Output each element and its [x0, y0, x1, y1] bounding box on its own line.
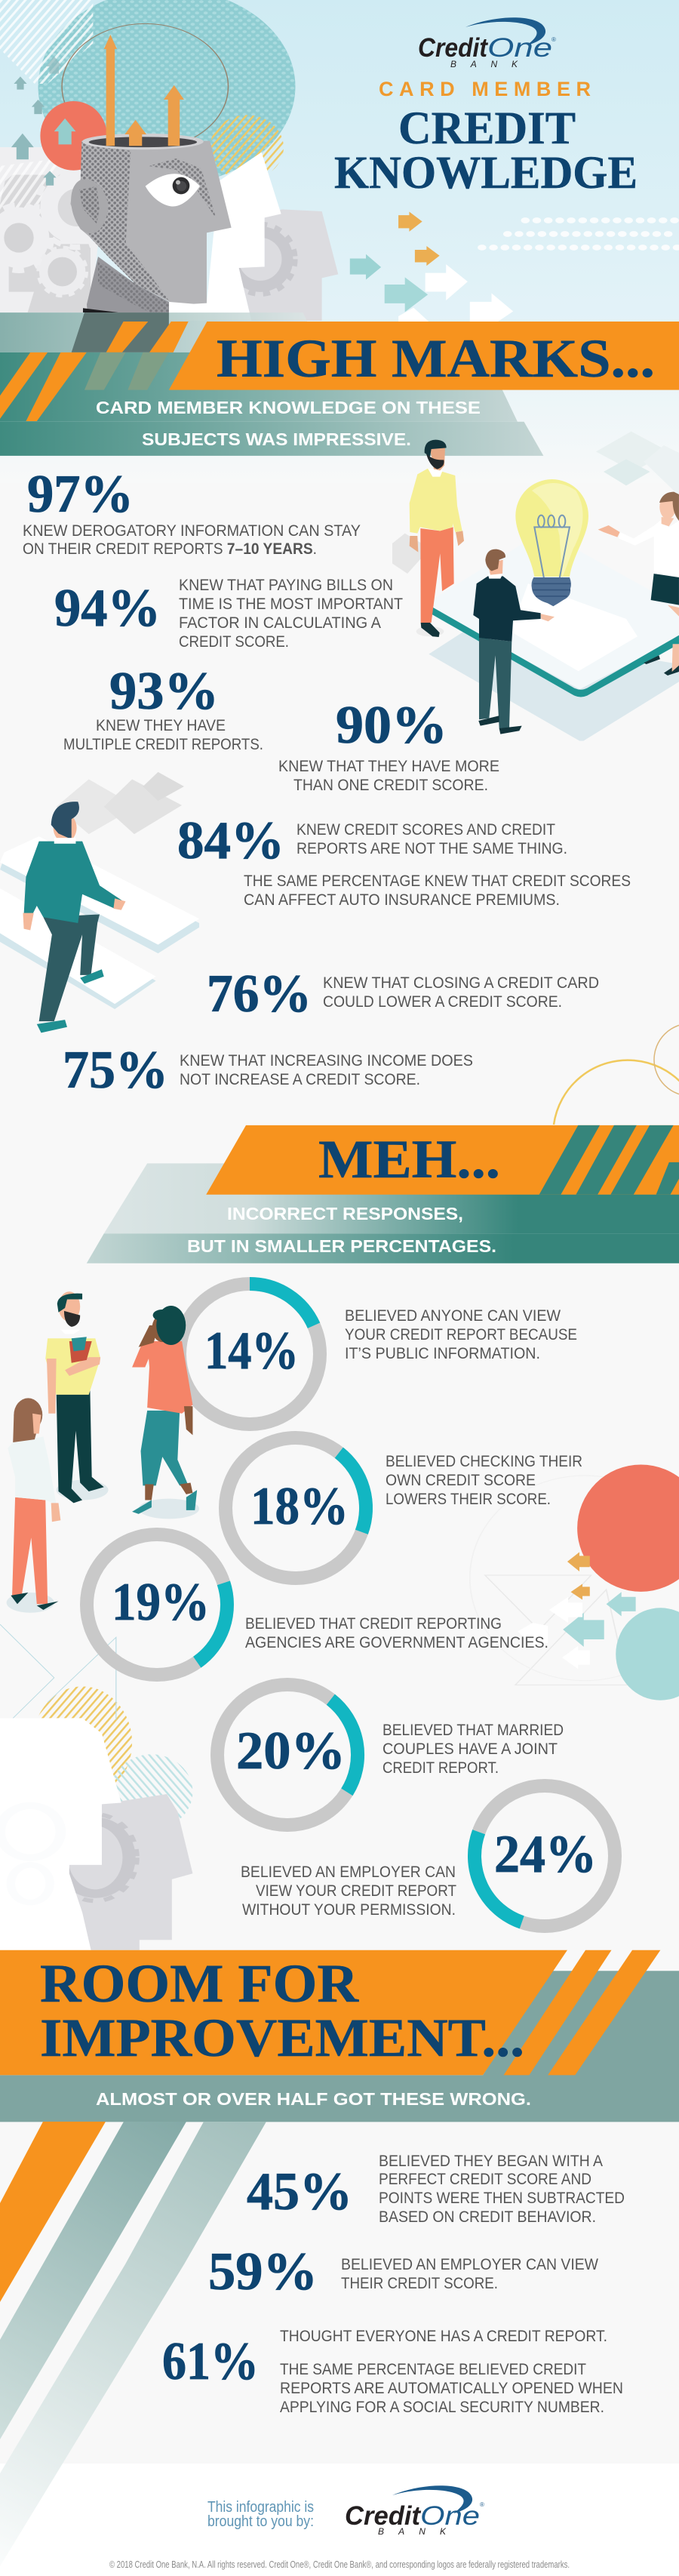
stat: 94%: 94%	[54, 579, 161, 638]
text: 24%: VIEW YOUR CREDIT REPORT	[256, 1882, 456, 1900]
stat: 97%: KNEW DEROGATORY INFORMATION CAN STAY	[23, 522, 361, 540]
head rim and rising arrows	[82, 35, 204, 149]
stat: 84%: 84%	[177, 811, 284, 870]
stat: 94%: KNEW THAT PAYING BILLS ON	[179, 577, 393, 594]
ring: 19%: 19%	[112, 1573, 210, 1632]
stat: 90%: 90%	[336, 696, 447, 755]
halftone back of head	[81, 142, 168, 300]
illustration: people around light bulb	[410, 440, 679, 734]
heading: credit knowledge: CREDIT	[398, 103, 576, 154]
ring: 24%: 24%	[494, 1825, 597, 1884]
banner: high marks: SUBJECTS WAS IMPRESSIVE.	[142, 429, 411, 449]
right pointing arrows	[350, 212, 513, 322]
text: 19%: BELIEVED THAT CREDIT REPORTING	[245, 1615, 502, 1633]
ring: 20%: 20%	[236, 1722, 346, 1780]
hero backdrop shapes	[0, 0, 679, 322]
orange band	[169, 322, 679, 390]
ring: 19%	[87, 1534, 227, 1675]
stat: 59%: BELIEVED AN EMPLOYER CAN VIEW	[341, 2256, 598, 2273]
ring: 24%	[475, 1786, 615, 1926]
stat: 76%: 76%	[207, 965, 312, 1023]
footer credit text: This infographic is	[207, 2499, 314, 2516]
ring: 14%: 14%	[204, 1322, 299, 1380]
stat: 94%	[54, 577, 403, 651]
stat: 76%: KNEW THAT CLOSING A CREDIT CARD	[323, 974, 599, 992]
ring: 14%	[180, 1284, 320, 1424]
stat: 97%: ON THEIR CREDIT REPORTS 7–10 YEARS.	[23, 540, 317, 558]
face	[70, 141, 232, 304]
text: 18%	[386, 1453, 582, 1508]
text: 24%	[241, 1864, 456, 1919]
woman presenting	[598, 492, 679, 676]
orange band	[0, 1950, 567, 2075]
footer credit text: brought to you by:	[207, 2513, 314, 2530]
ghost heads with gears	[0, 147, 338, 321]
diamonds	[392, 432, 679, 574]
stat: 94%: TIME IS THE MOST IMPORTANT	[179, 596, 403, 613]
stat: 84%: THE SAME PERCENTAGE KNEW THAT CREDIT SCORES	[244, 873, 631, 890]
stat: 59%: THEIR CREDIT SCORE.	[341, 2275, 498, 2292]
ring: 18%	[226, 1438, 366, 1578]
band: upper grey	[0, 312, 321, 352]
band: lower gradient	[0, 422, 543, 456]
banner: meh: BUT IN SMALLER PERCENTAGES.	[187, 1236, 496, 1256]
man with books	[45, 1291, 108, 1503]
teal band	[0, 1971, 679, 2122]
stat: 94%: FACTOR IN CALCULATING A	[179, 614, 381, 632]
ghost head with gear	[0, 1718, 192, 1950]
stat: 61%: THOUGHT EVERYONE HAS A CREDIT REPORT.	[280, 2328, 607, 2345]
subtitle band lower	[87, 1233, 679, 1263]
stat: 94%: CREDIT SCORE.	[179, 633, 289, 651]
platform	[429, 531, 679, 697]
stat: 59%	[208, 2242, 598, 2301]
text: 24%: WITHOUT YOUR PERMISSION.	[242, 1901, 456, 1919]
banner: high marks	[0, 312, 679, 456]
illustration: three people	[7, 1291, 199, 1613]
decorative yellow arcs	[554, 1023, 679, 1137]
banner: meh: INCORRECT RESPONSES,	[227, 1204, 463, 1223]
large teal circle	[38, 0, 295, 185]
right side decoration: circles and arrows	[470, 1464, 679, 1700]
logo: Credit One Bank: BANK	[450, 59, 518, 69]
heading: card member: CARD MEMBER	[379, 78, 591, 100]
stat: 84%: CAN AFFECT AUTO INSURANCE PREMIUMS.	[244, 891, 560, 909]
text: 20%: CREDIT REPORT.	[383, 1759, 499, 1777]
platforms	[0, 836, 199, 1009]
logo: Credit One Bank: ®	[551, 36, 556, 43]
footer logo: BANK	[378, 2526, 447, 2537]
ring: 20%	[217, 1685, 358, 1825]
stat: 90%: KNEW THAT THEY HAVE MORE	[278, 758, 499, 775]
woman from behind	[7, 1398, 60, 1613]
stat: 61%	[162, 2328, 623, 2416]
stat: 45%: PERFECT CREDIT SCORE AND	[379, 2171, 591, 2188]
white ghost head	[169, 152, 281, 321]
text: 14%: YOUR CREDIT REPORT BECAUSE	[345, 1326, 577, 1343]
footer logo	[345, 2485, 484, 2537]
neck shadow	[72, 312, 169, 352]
diagonal stripes	[0, 2122, 266, 2566]
stat: 75%	[63, 1041, 473, 1100]
neck	[83, 257, 169, 321]
teal stripes	[539, 1125, 679, 1195]
decorative thin lines and striped circles	[0, 1624, 192, 1830]
logo: Credit One Bank: One	[487, 33, 552, 63]
stat: 61%: 61%	[162, 2332, 259, 2391]
text: 14%: IT’S PUBLIC INFORMATION.	[345, 1345, 540, 1362]
text: 14%	[345, 1307, 577, 1362]
light bulb	[515, 479, 588, 606]
heading: credit knowledge: KNOWLEDGE	[334, 148, 638, 199]
text: 24%: BELIEVED AN EMPLOYER CAN	[241, 1864, 456, 1881]
banner: meh	[87, 1125, 679, 1263]
footer logo: Credit	[345, 2501, 421, 2531]
logo: Credit One Bank: Credit	[418, 33, 488, 63]
stat: 45%: 45%	[247, 2162, 352, 2221]
banner: room for improvement: ROOM FOR	[40, 1953, 359, 2014]
banner: room for improvement: IMPROVEMENT...	[40, 2008, 524, 2068]
stripes	[0, 322, 189, 421]
stat: 75%: NOT INCREASE A CREDIT SCORE.	[180, 1071, 420, 1088]
rising orange arrows	[104, 35, 184, 146]
text: 14%: BELIEVED ANYONE CAN VIEW	[345, 1307, 561, 1325]
stat: 76%: COULD LOWER A CREDIT SCORE.	[323, 993, 562, 1011]
right ghost head	[226, 209, 338, 321]
stat: 97%	[23, 465, 361, 558]
man	[23, 802, 125, 1033]
stat: 93%: KNEW THEY HAVE	[96, 717, 226, 734]
stat: 45%	[247, 2153, 625, 2226]
red circle	[40, 101, 107, 171]
man in yellow sweater	[410, 440, 464, 637]
banner: meh: MEH...	[318, 1129, 500, 1190]
illustration: people around light bulb (background part)	[392, 432, 679, 741]
stat: 90%: THAN ONE CREDIT SCORE.	[293, 777, 488, 794]
man in dark sweater	[473, 549, 555, 734]
stat: 90%	[278, 696, 499, 794]
platform shadow	[429, 629, 679, 741]
footer logo: One	[420, 2501, 480, 2531]
heading: credit knowledge	[334, 103, 638, 199]
banner: room for improvement	[0, 1950, 679, 2122]
stat: 75%: 75%	[63, 1041, 168, 1100]
text: 18%: LOWERS THEIR SCORE.	[386, 1491, 551, 1508]
stat: 93%	[63, 662, 263, 753]
text: 19%	[245, 1615, 548, 1651]
stat: 61%: APPLYING FOR A SOCIAL SECURITY NUMBER.	[280, 2399, 604, 2416]
stat: 45%: BELIEVED THEY BEGAN WITH A	[379, 2153, 603, 2170]
left ghost heads	[0, 147, 116, 312]
band: subtitle gradient	[0, 352, 518, 422]
stat: 45%: POINTS WERE THEN SUBTRACTED	[379, 2190, 625, 2207]
red circle and up arrows	[11, 57, 107, 186]
stat: 45%: BASED ON CREDIT BEHAVIOR.	[379, 2208, 596, 2226]
striped corner decoration	[0, 0, 93, 84]
woman with phone	[132, 1306, 199, 1519]
stat: 76%	[207, 965, 599, 1023]
stat: 93%: MULTIPLE CREDIT REPORTS.	[63, 736, 263, 753]
ear	[71, 180, 108, 233]
orange band	[206, 1125, 679, 1195]
text: 18%: OWN CREDIT SCORE	[386, 1472, 536, 1489]
grey head	[70, 141, 232, 321]
thin outline circle	[62, 23, 228, 149]
banner: high marks: CARD MEMBER KNOWLEDGE ON THESE	[96, 398, 481, 417]
stat: 59%: 59%	[208, 2242, 318, 2301]
subtitle band upper	[104, 1163, 679, 1233]
dotted lines	[482, 220, 679, 248]
rim	[82, 134, 204, 149]
text: 19%: AGENCIES ARE GOVERNMENT AGENCIES.	[245, 1634, 548, 1651]
text: 20%: BELIEVED THAT MARRIED	[383, 1722, 564, 1739]
text: 18%: BELIEVED CHECKING THEIR	[386, 1453, 582, 1470]
stat: 61%: REPORTS ARE AUTOMATICALLY OPENED WHEN	[280, 2380, 623, 2397]
illustration: man stepping up	[0, 802, 199, 1033]
text: 20%	[383, 1722, 564, 1777]
yellow striped circle	[210, 115, 284, 180]
stat: 84%: KNEW CREDIT SCORES AND CREDIT	[296, 821, 555, 839]
stat: 97%: 97%	[27, 465, 134, 524]
footer logo: ®	[480, 2501, 484, 2508]
text: 20%: COUPLES HAVE A JOINT	[383, 1740, 558, 1758]
stat: 93%: 93%	[109, 662, 219, 721]
orange stripes	[504, 1950, 660, 2075]
stat: 84%: REPORTS ARE NOT THE SAME THING.	[296, 840, 567, 857]
icon: eye	[146, 174, 200, 206]
stat: 61%: THE SAME PERCENTAGE BELIEVED CREDIT	[280, 2361, 586, 2378]
ring: 18%: 18%	[250, 1477, 349, 1536]
logo: Credit One Bank	[418, 17, 556, 69]
grey diamonds near stepping man	[57, 772, 184, 834]
footer credit text	[207, 2499, 314, 2530]
stat: 75%: KNEW THAT INCREASING INCOME DOES	[180, 1052, 473, 1069]
halftone brow	[149, 158, 217, 219]
up arrows	[11, 57, 75, 186]
stat: 84%	[177, 811, 631, 909]
banner: room for improvement: ALMOST OR OVER HALF GOT THESE WRONG.	[96, 2089, 531, 2109]
banner: high marks: HIGH MARKS...	[217, 328, 655, 389]
